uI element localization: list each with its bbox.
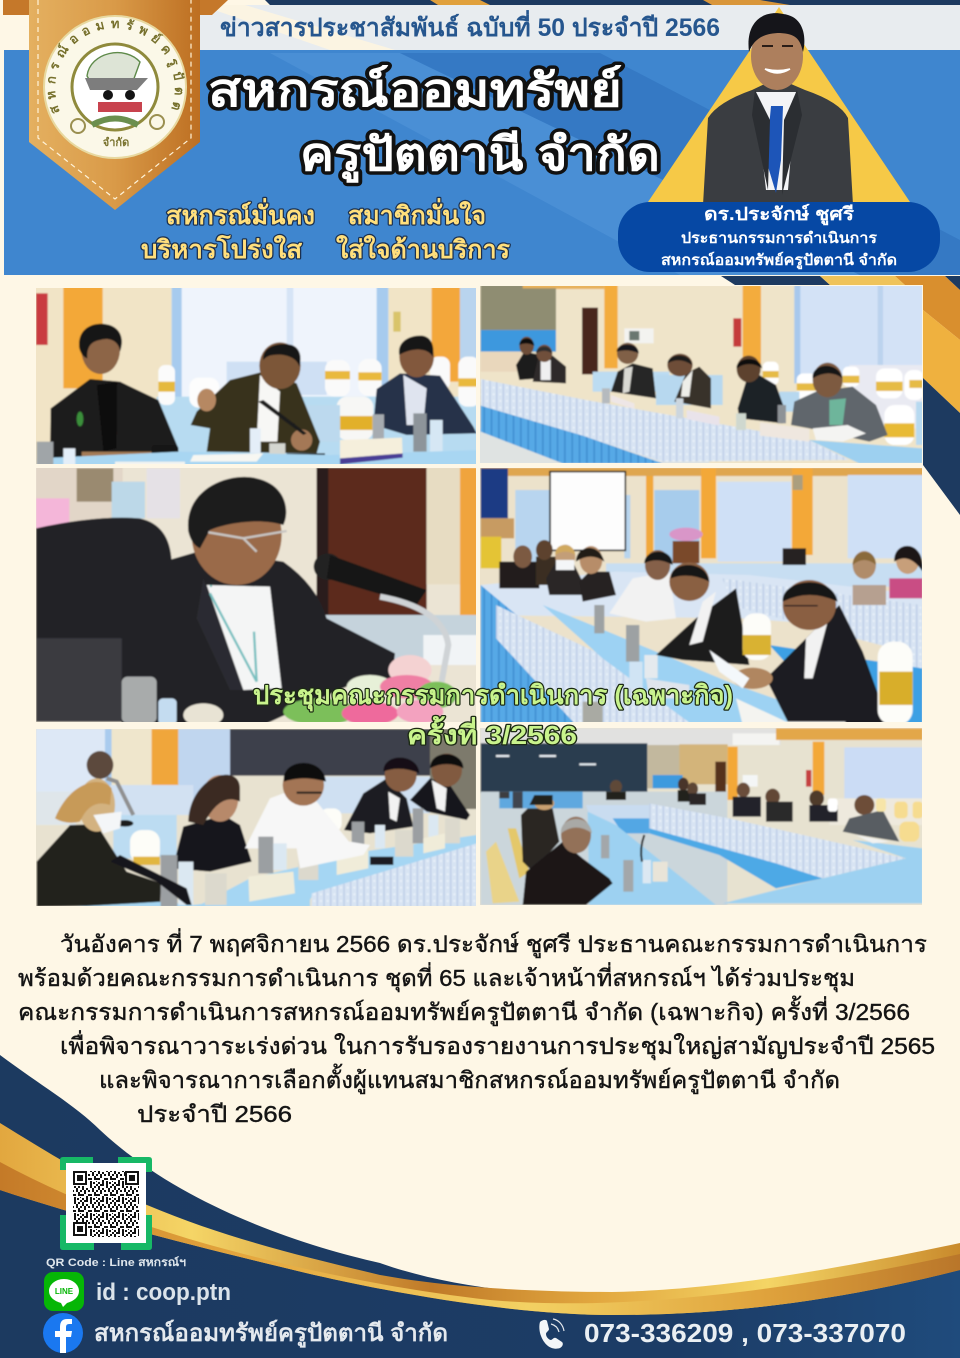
slogan: ใส่ใจด้านบริการ [336, 234, 511, 264]
orange top tab behind shield [3, 0, 122, 15]
president name pill: ประธานกรรมการดำเนินการ [681, 229, 878, 247]
body text: คณะกรรมการดำเนินการสหกรณ์ออมทรัพย์ครูปัตตานี จำกัด (เฉพาะกิจ) ครั้งที่ 3/2566 [18, 996, 910, 1026]
meeting heading overlay: ครั้งที่ 3/2566 [407, 715, 577, 750]
meeting heading overlay: ประชุมคณะกรรมการดำเนินการ (เฉพาะกิจ) [253, 680, 733, 712]
phone numbers: 073-336209 , 073-337070 [584, 1318, 906, 1348]
icon: cooperative logo [43, 15, 187, 159]
president name pill: สหกรณ์ออมทรัพย์ครูปัตตานี จำกัด [661, 251, 897, 270]
slogan: บริหารโปร่งใส [141, 234, 303, 264]
president name pill [618, 202, 940, 272]
line id: id : coop.ptn [96, 1279, 231, 1306]
slogan: สมาชิกมั่นใจ [348, 198, 486, 230]
icon: cooperative logo: จำกัด [103, 136, 129, 149]
top decoration band [0, 0, 960, 53]
slogan [141, 198, 511, 264]
body text: และพิจารณาการเลือกตั้งผู้แทนสมาชิกสหกรณ์ออมทรัพย์ครูปัตตานี จำกัด [99, 1064, 840, 1094]
icon: line: LINE [55, 1287, 74, 1296]
newsletter heading: ข่าวสารประชาสัมพันธ์ ฉบับที่ 50 ประจำปี 2566 [220, 10, 720, 42]
icon: line [44, 1272, 84, 1311]
slogan: สหกรณ์มั่นคง [166, 198, 315, 230]
yellow triangle behind portrait [648, 7, 910, 202]
QR caption: QR Code : Line สหกรณ์ฯ [46, 1256, 186, 1269]
photo 6: whole meeting room [476, 727, 926, 908]
body text: พร้อมด้วยคณะกรรมการดำเนินการ ชุดที่ 65 และเจ้าหน้าที่สหกรณ์ฯ ได้ร่วมประชุม [18, 962, 855, 992]
portrait: president [703, 13, 853, 205]
photo 4: wide room with screen and members [476, 467, 926, 727]
icon: phone [539, 1319, 564, 1349]
president name pill: ดร.ประจักษ์ ชูศรี [704, 203, 854, 226]
QR code [60, 1157, 152, 1250]
photo 2: long table, row of members [476, 285, 926, 465]
body text: เพื่อพิจารณาวาระเร่งด่วน ในการรับรองรายงานการประชุมใหญ่สามัญประจำปี 2565 [60, 1030, 935, 1060]
photo 3: president speaking close-up [30, 465, 480, 727]
body text [18, 928, 935, 1127]
facebook name: สหกรณ์ออมทรัพย์ครูปัตตานี จำกัด [94, 1319, 448, 1348]
meeting heading overlay [253, 680, 733, 750]
photo 1: three committee members [30, 285, 480, 467]
photo 5: members seated along table [30, 727, 480, 910]
header blue panel [0, 50, 960, 287]
body text: วันอังคาร ที่ 7 พฤศจิกายน 2566 ดร.ประจักษ์ ชูศรี ประธานคณะกรรมการดำเนินการ [60, 928, 927, 958]
icon: facebook [43, 1313, 83, 1353]
body text: ประจำปี 2566 [137, 1101, 292, 1127]
title [208, 64, 660, 183]
title: ครูปัตตานี จำกัด [300, 128, 660, 183]
bottom navy swoosh [0, 1055, 960, 1358]
shield with logo [29, 0, 200, 210]
corner decoration right [721, 276, 960, 515]
gold swoosh [0, 1123, 960, 1315]
title: สหกรณ์ออมทรัพย์ [208, 64, 622, 116]
